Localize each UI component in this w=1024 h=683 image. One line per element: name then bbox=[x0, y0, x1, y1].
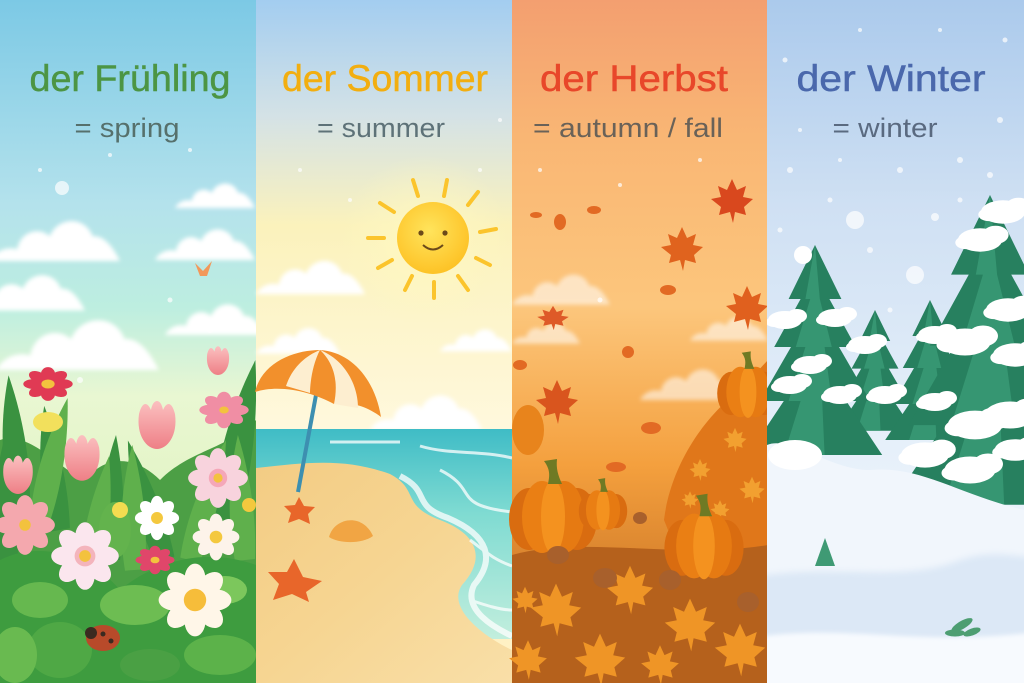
beach bbox=[256, 463, 512, 683]
title: der Frühling: der Frühling bbox=[30, 58, 230, 99]
title: der Winter: der Winter bbox=[796, 58, 986, 99]
flowers bbox=[0, 346, 256, 636]
snow and pollen specks bbox=[38, 28, 1008, 383]
title: der Sommer: der Sommer bbox=[282, 58, 488, 99]
falling and ground leaves bbox=[509, 179, 768, 683]
clouds: summer sky bbox=[256, 261, 512, 430]
icon: green sprout bbox=[945, 618, 980, 636]
snow ground bbox=[767, 443, 1005, 505]
subtitle: winter: = winter bbox=[832, 113, 938, 143]
subtitle: spring: = spring bbox=[74, 113, 180, 143]
title: der Herbst: der Herbst bbox=[540, 58, 729, 99]
icon: butterfly bbox=[195, 261, 212, 276]
icon: beach umbrella bbox=[255, 350, 381, 492]
clouds: spring sky bbox=[0, 183, 265, 370]
foliage bush bbox=[664, 360, 768, 560]
icon: starfish small bbox=[284, 497, 315, 524]
panel: summer bbox=[255, 0, 512, 683]
snowy fir trees bbox=[748, 195, 1024, 505]
pumpkins bbox=[509, 351, 779, 579]
subtitle: autumn / fall: = autumn / fall bbox=[533, 113, 723, 143]
icon: starfish large bbox=[268, 559, 322, 602]
subtitle: summer: = summer bbox=[317, 113, 445, 143]
waves bbox=[330, 442, 512, 636]
icon: sun with face bbox=[368, 180, 496, 298]
icon: seashell bbox=[329, 520, 373, 542]
panel: autumn bbox=[509, 0, 779, 683]
icon: ladybird bbox=[85, 625, 120, 651]
icon: small sapling bbox=[815, 538, 835, 566]
panel: winter bbox=[740, 0, 1024, 683]
panel: spring bbox=[0, 0, 265, 683]
ground bbox=[512, 545, 768, 683]
grass and leaves bbox=[0, 357, 265, 683]
sea bbox=[256, 429, 512, 639]
clouds: autumn sky bbox=[512, 275, 768, 400]
